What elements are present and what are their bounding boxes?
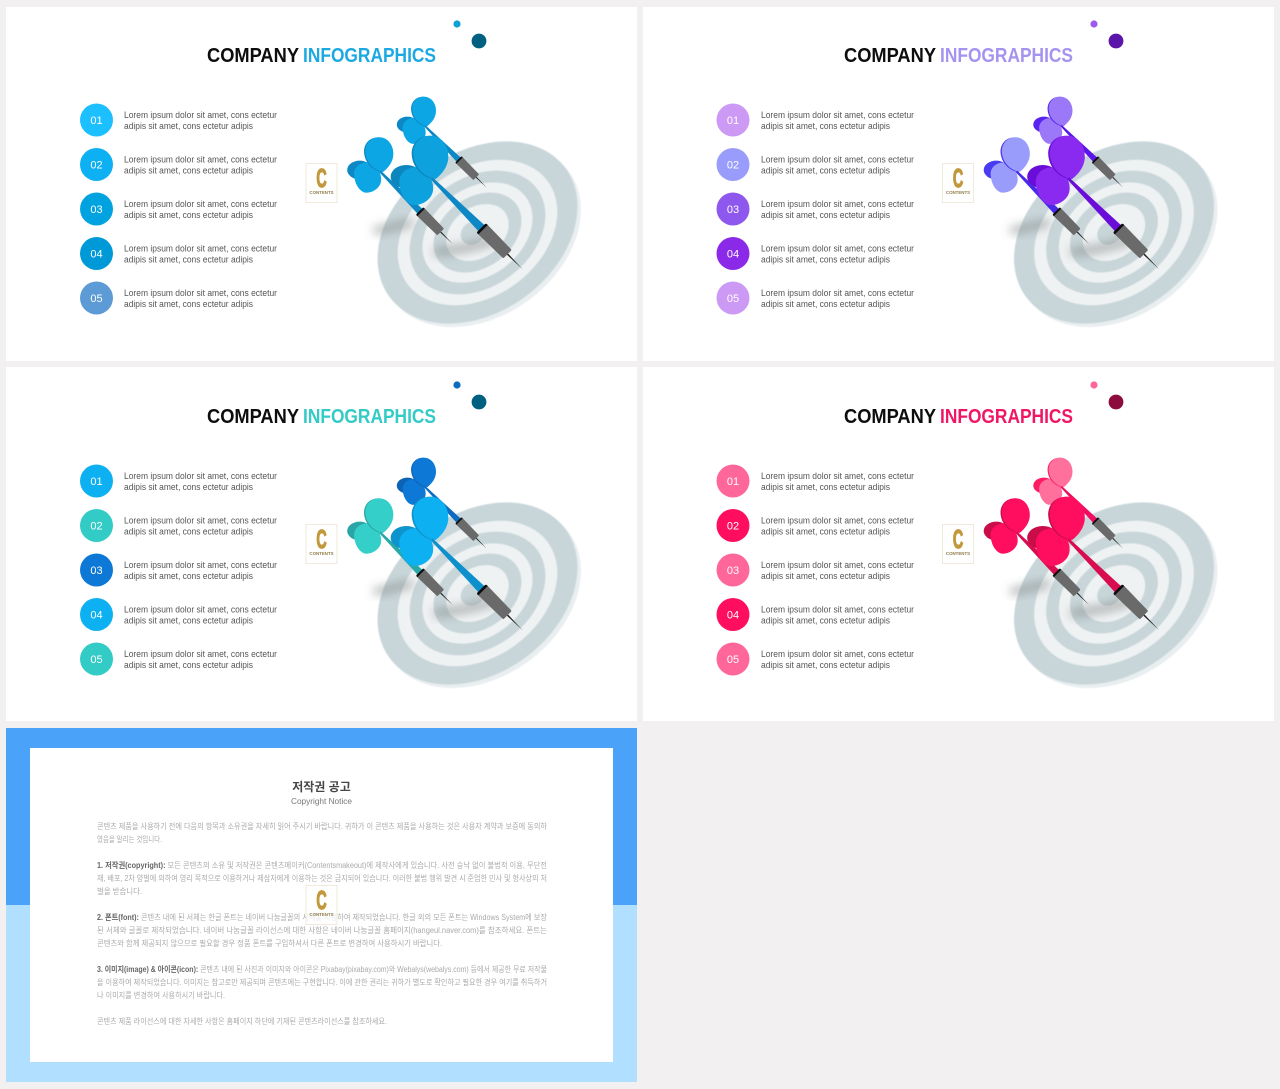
- logo: CONTENTS: [946, 551, 970, 556]
- icon: darts: [984, 458, 1164, 635]
- logo: C: [316, 165, 327, 193]
- list item 02: Lorem ipsum dolor sit amet, cons ectetur: [124, 154, 277, 164]
- list item 03: adipis sit amet, cons ectetur adipis: [761, 210, 890, 220]
- icon: target board: [342, 465, 616, 726]
- list item 02: 02: [90, 160, 103, 172]
- list item 03: Lorem ipsum dolor sit amet, cons ectetur: [761, 560, 914, 570]
- list item 01: 01: [90, 476, 103, 488]
- text block: notice body: 을 이용하여 제작되었습니다. 이미지는 참고로만 제공되며 콘텐츠에는 구현합니다. 이에 관한 권리는 귀하가 별도로 확인하고 필요한 경우 여기를 취득하거: [97, 977, 547, 987]
- text block: notice body: 1. 저작권(copyright): 모든 콘텐츠의 소유 및 저작권은 콘텐츠메이커(Contentsmakeout)에 제작사에게 있습니다. 사전 승낙 없이 불법적 이용, 무단전: [97, 860, 547, 870]
- title: COMPANY: [844, 405, 936, 428]
- list item 03: [80, 192, 277, 226]
- list item 05: Lorem ipsum dolor sit amet, cons ectetur: [761, 288, 914, 298]
- title: [844, 405, 1073, 428]
- logo: C: [953, 165, 963, 193]
- list item 05: 05: [727, 654, 739, 666]
- panel: blue: [6, 7, 637, 365]
- list item 01: Lorem ipsum dolor sit amet, cons ectetur: [124, 471, 277, 481]
- decorative dots: [453, 20, 486, 48]
- list item 04: 04: [90, 610, 103, 622]
- list item 02: [716, 148, 914, 181]
- list item 03: adipis sit amet, cons ectetur adipis: [761, 571, 890, 581]
- text block: notice body: 콘텐츠 제품 라이선스에 대한 자세한 사항은 홈페이지 하단에 기재된 콘텐츠라이선스를 참조하세요.: [97, 1016, 387, 1026]
- text block: notice body: 였음을 알리는 것입니다.: [97, 834, 162, 844]
- icon: darts: [347, 458, 527, 635]
- list item 01: adipis sit amet, cons ectetur adipis: [761, 121, 890, 131]
- list item 01: Lorem ipsum dolor sit amet, cons ectetur: [761, 471, 914, 481]
- list item 05: adipis sit amet, cons ectetur adipis: [761, 299, 890, 309]
- logo: CONTENTS: [946, 190, 970, 195]
- list item 01: 01: [727, 476, 739, 488]
- heading: copyright notice: 저작권 공고: [292, 779, 351, 794]
- panel: teal: [6, 367, 637, 726]
- list item 04: adipis sit amet, cons ectetur adipis: [124, 254, 253, 264]
- icon: target board: [342, 104, 616, 365]
- logo: CONTENTS: [309, 912, 334, 917]
- title: INFOGRAPHICS: [940, 44, 1073, 67]
- list item 04: 04: [90, 248, 103, 260]
- heading: copyright notice: [291, 779, 352, 806]
- list item 03: 03: [90, 204, 103, 216]
- list item 03: 03: [727, 565, 739, 577]
- list item 04: Lorem ipsum dolor sit amet, cons ectetur: [124, 244, 277, 254]
- list item 01: [80, 104, 277, 136]
- decorative dots: [1090, 20, 1123, 48]
- list item 02: [716, 509, 914, 542]
- logo: [942, 524, 974, 564]
- logo: C: [316, 887, 327, 915]
- list item 02: adipis sit amet, cons ectetur adipis: [761, 526, 890, 536]
- logo: CONTENTS: [309, 551, 334, 556]
- list item 01: adipis sit amet, cons ectetur adipis: [124, 121, 253, 131]
- title: COMPANY: [207, 44, 299, 67]
- list item 05: adipis sit amet, cons ectetur adipis: [124, 299, 253, 309]
- list item 03: Lorem ipsum dolor sit amet, cons ectetur: [761, 199, 914, 209]
- title: INFOGRAPHICS: [940, 405, 1073, 428]
- list item 05: Lorem ipsum dolor sit amet, cons ectetur: [761, 649, 914, 659]
- text block: notice body: [97, 821, 548, 1026]
- text block: notice body: 3. 이미지(image) & 아이콘(icon): 콘텐츠 내에 된 사진과 이미지와 아이콘은 Pixabay(pixabay.com)와 Webalys(webalys.com) 등에서 제공한 무료 저작물: [97, 964, 547, 974]
- heading: copyright notice: Copyright Notice: [291, 796, 352, 806]
- panel: copyright notice: [6, 728, 637, 1082]
- list item 01: [716, 464, 914, 498]
- list item 04: Lorem ipsum dolor sit amet, cons ectetur: [761, 244, 914, 254]
- list item 04: 04: [727, 610, 739, 622]
- list item 02: adipis sit amet, cons ectetur adipis: [124, 526, 253, 536]
- list item 02: 02: [727, 160, 739, 172]
- list item 02: 02: [90, 520, 103, 532]
- title: INFOGRAPHICS: [303, 405, 436, 428]
- list item 01: Lorem ipsum dolor sit amet, cons ectetur: [124, 110, 277, 120]
- title: [844, 44, 1073, 67]
- logo: [306, 886, 337, 924]
- text block: notice body: 된 서체와 글꼴로 제작되었습니다. 네이버 나눔글꼴 라이선스에 대한 사항은 네이버 나눔글꼴 홈페이지(hangeul.naver.com)를 참조하세요. 폰트는: [97, 925, 547, 935]
- list item 05: 05: [90, 293, 103, 305]
- list item 05: 05: [90, 654, 103, 666]
- list item 05: Lorem ipsum dolor sit amet, cons ectetur: [124, 649, 277, 659]
- list item 05: Lorem ipsum dolor sit amet, cons ectetur: [124, 288, 277, 298]
- list item 05: adipis sit amet, cons ectetur adipis: [124, 660, 253, 670]
- icon: target board: [979, 104, 1253, 365]
- decorative dots: [453, 381, 486, 409]
- list item 03: adipis sit amet, cons ectetur adipis: [124, 571, 253, 581]
- text block: notice body: 나 이미지를 변경하여 사용하시기 바랍니다.: [97, 990, 225, 1000]
- list item 03: 03: [727, 204, 739, 216]
- panel: pink: [643, 367, 1274, 726]
- list item 04: [716, 598, 914, 631]
- list item 01: 01: [727, 115, 739, 127]
- list item 03: [716, 192, 914, 226]
- text block: notice body: 콘텐츠와 함께 제공되지 않으므로 필요할 경우 정품 폰트를 구입하셔서 다른 폰트로 변경하여 사용하시기 바랍니다.: [97, 938, 442, 948]
- text block: notice body: 재, 배포, 2차 양벌에 의하여 영리 목적으로 이용하거나 제삼자에게 이용하는 것은 금지되어 있습니다. 이러한 불법 행위 발견 시 준엄한 민사 및 형사상의 처: [97, 873, 547, 883]
- logo: [306, 524, 337, 564]
- text block: notice body: 콘텐츠 제품을 사용하기 전에 다음의 항목과 소유권을 자세히 읽어 주시기 바랍니다. 귀하가 이 콘텐츠 제품을 사용하는 것은 사용자 계약과 보증에 동의하: [97, 821, 548, 831]
- list item 02: adipis sit amet, cons ectetur adipis: [761, 166, 890, 176]
- list item 05: 05: [727, 293, 739, 305]
- list item 01: adipis sit amet, cons ectetur adipis: [124, 482, 253, 492]
- list item 01: [80, 464, 277, 498]
- list item 03: adipis sit amet, cons ectetur adipis: [124, 210, 253, 220]
- list item 04: [716, 237, 914, 270]
- list item 04: [80, 598, 277, 631]
- list item 01: [716, 104, 914, 136]
- list item 04: adipis sit amet, cons ectetur adipis: [761, 254, 890, 264]
- logo: C: [953, 526, 963, 554]
- list item 03: Lorem ipsum dolor sit amet, cons ectetur: [124, 560, 277, 570]
- list item 04: [80, 237, 277, 270]
- list item 03: [716, 554, 914, 586]
- list item 02: [80, 509, 277, 542]
- text block: notice body: 벌을 받습니다.: [97, 886, 142, 896]
- list item 02: Lorem ipsum dolor sit amet, cons ectetur: [761, 154, 914, 164]
- logo: C: [316, 526, 327, 554]
- title: COMPANY: [207, 405, 299, 428]
- list item 04: Lorem ipsum dolor sit amet, cons ectetur: [124, 604, 277, 614]
- title: COMPANY: [844, 44, 936, 67]
- list item 05: [716, 642, 914, 676]
- list item 05: adipis sit amet, cons ectetur adipis: [761, 660, 890, 670]
- panel: purple: [643, 7, 1274, 365]
- list item 05: [80, 282, 277, 314]
- logo: [942, 164, 974, 202]
- logo: CONTENTS: [309, 190, 334, 195]
- list item 02: Lorem ipsum dolor sit amet, cons ectetur: [124, 516, 277, 526]
- list item 03: 03: [90, 565, 103, 577]
- icon: target board: [979, 465, 1253, 726]
- title: [207, 405, 436, 428]
- list item 04: Lorem ipsum dolor sit amet, cons ectetur: [761, 604, 914, 614]
- list item 02: [80, 148, 277, 181]
- icon: darts: [984, 97, 1164, 274]
- list item 01: adipis sit amet, cons ectetur adipis: [761, 482, 890, 492]
- list item 03: Lorem ipsum dolor sit amet, cons ectetur: [124, 199, 277, 209]
- list item 02: adipis sit amet, cons ectetur adipis: [124, 166, 253, 176]
- list item 01: Lorem ipsum dolor sit amet, cons ectetur: [761, 110, 914, 120]
- list item 04: adipis sit amet, cons ectetur adipis: [124, 616, 253, 626]
- icon: darts: [347, 97, 527, 274]
- list item 03: [80, 554, 277, 586]
- list item 02: Lorem ipsum dolor sit amet, cons ectetur: [761, 516, 914, 526]
- text block: notice body: 2. 폰트(font): 콘텐츠 내에 된 서체는 한글 폰트는 네이버 나눔글꼴의 서체를 사용하여 제작되었습니다. 한글 외의 모든 폰트는 Windows System에 보장: [97, 912, 548, 922]
- list item 05: [716, 282, 914, 314]
- list item 04: 04: [727, 248, 739, 260]
- list item 04: adipis sit amet, cons ectetur adipis: [761, 616, 890, 626]
- logo: [306, 164, 337, 202]
- decorative dots: [1090, 381, 1123, 409]
- title: INFOGRAPHICS: [303, 44, 436, 67]
- list item 02: 02: [727, 520, 739, 532]
- list item 05: [80, 642, 277, 676]
- list item 01: 01: [90, 115, 103, 127]
- title: [207, 44, 436, 67]
